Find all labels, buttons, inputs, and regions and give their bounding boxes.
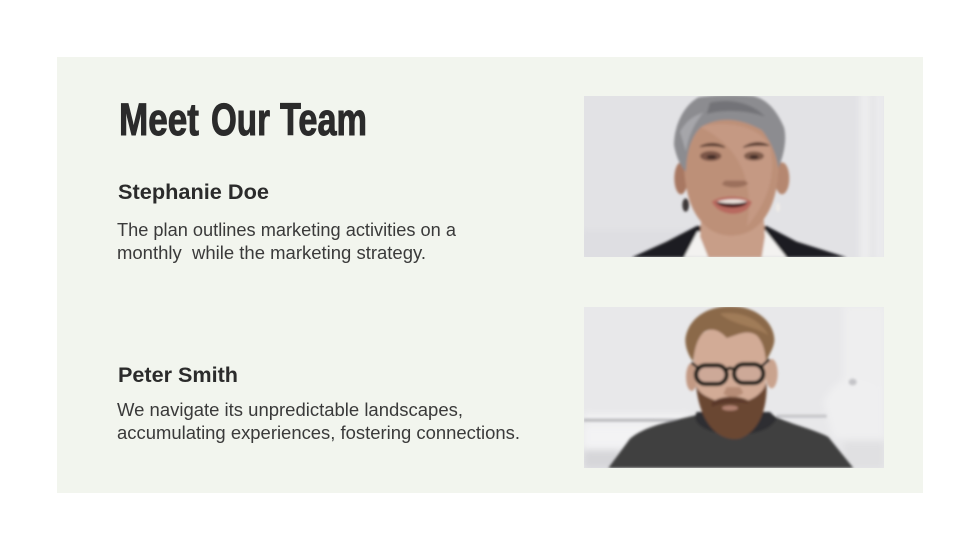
nose shadow <box>722 181 748 187</box>
mouth <box>712 197 752 214</box>
panel: team background <box>57 57 923 493</box>
face <box>692 328 768 401</box>
eyes <box>700 151 721 161</box>
title: Our <box>211 94 270 145</box>
photo: Peter Smith portrait <box>583 305 885 469</box>
neck <box>700 213 765 257</box>
hair <box>674 95 785 172</box>
team member description: Stephanie Doe: The plan outlines marketing activities on a <box>117 220 457 240</box>
title: Team <box>280 94 367 145</box>
ears <box>674 162 688 194</box>
face <box>684 118 779 236</box>
team member description: Peter Smith <box>117 400 520 443</box>
jacket <box>632 226 847 257</box>
beard <box>696 382 767 439</box>
title: Meet <box>119 94 199 145</box>
team member name: Stephanie Doe: Stephanie Doe <box>118 180 269 204</box>
team member description: Peter Smith: accumulating experiences, fostering connections. <box>117 423 520 443</box>
ears <box>686 363 697 391</box>
team member description: Stephanie Doe <box>117 220 457 263</box>
team member description: Peter Smith: We navigate its unpredictable landscapes, <box>117 400 463 420</box>
hair <box>685 306 774 362</box>
eyebrows <box>700 143 725 147</box>
team member name: Peter Smith: Peter Smith <box>118 363 238 387</box>
nose shadow <box>723 387 743 397</box>
shirt <box>684 230 787 257</box>
sweater <box>608 414 853 468</box>
glasses <box>696 364 763 384</box>
title <box>119 94 367 145</box>
team member description: Stephanie Doe: monthly while the marketing strategy. <box>117 243 426 263</box>
earrings <box>682 198 689 212</box>
photo: Stephanie Doe portrait <box>580 90 885 262</box>
